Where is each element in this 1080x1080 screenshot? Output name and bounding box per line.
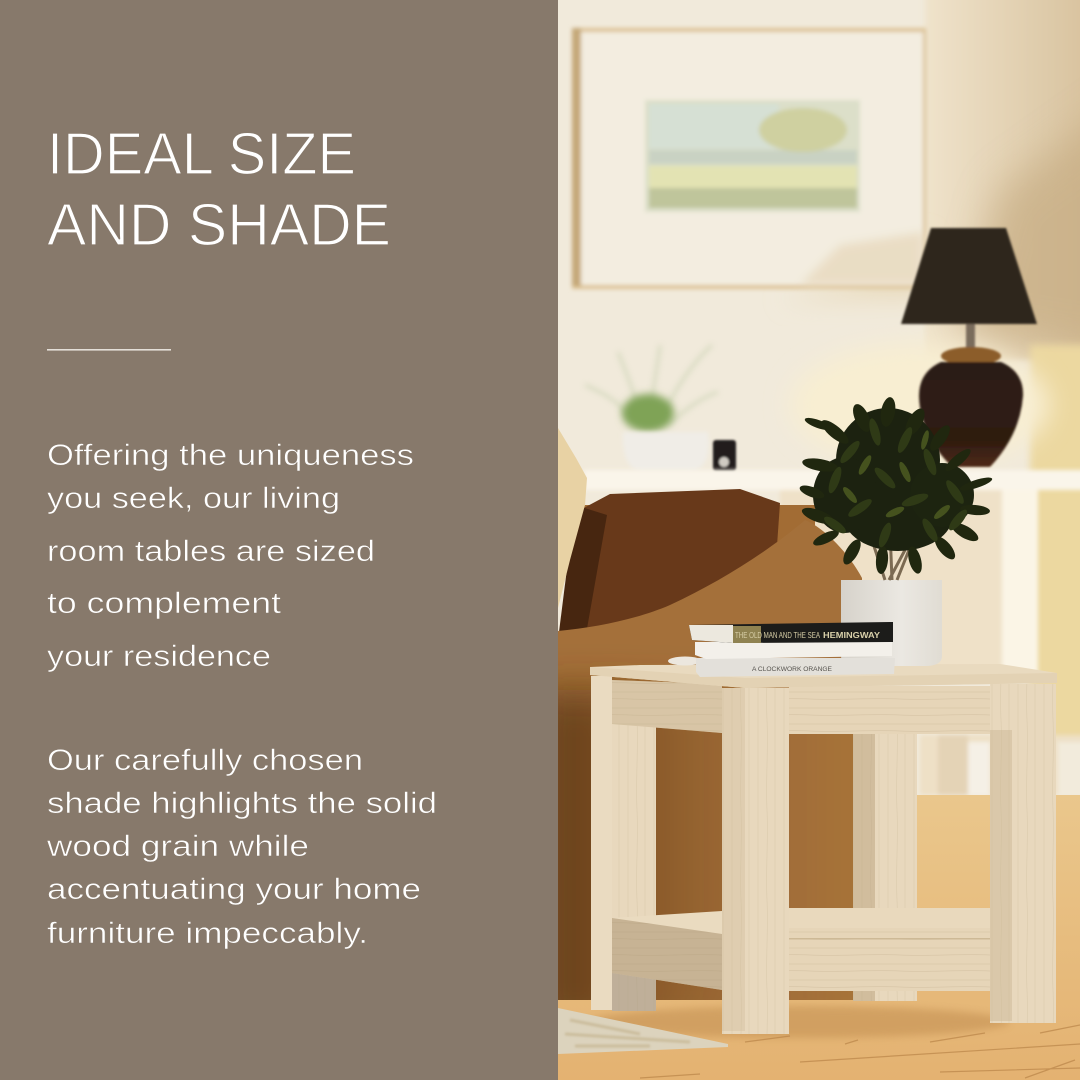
text block: uniqueness paragraph: your residence (47, 640, 271, 673)
right leg (990, 684, 1056, 1023)
text block: uniqueness paragraph: you seek, our living (47, 482, 340, 515)
stack of books (668, 622, 895, 677)
top book: HEMINGWAY (823, 630, 880, 640)
table top (590, 664, 1057, 688)
text block: shade paragraph (46, 744, 437, 950)
floor (558, 795, 1080, 1080)
sofa (558, 428, 862, 1000)
top book: THE OLD MAN AND THE SEA (735, 630, 820, 640)
text block: shade paragraph: accentuating your home (47, 873, 421, 906)
top book (689, 622, 893, 643)
title (47, 121, 391, 258)
middle book (695, 642, 892, 659)
text block: uniqueness paragraph (47, 439, 414, 673)
text block: shade paragraph: furniture impeccably. (47, 917, 368, 950)
sofa cushions (580, 489, 780, 645)
plant foliage (798, 396, 993, 575)
end table (590, 664, 1057, 1034)
stack of books: A CLOCKWORK ORANGE (752, 667, 832, 673)
text block: uniqueness paragraph: Offering the uniqueness (47, 439, 414, 472)
small black candle holder (713, 440, 736, 471)
title: IDEAL SIZE (47, 121, 356, 187)
panel: text background (0, 0, 558, 1080)
bottom book (696, 658, 895, 677)
text block: uniqueness paragraph: to complement (47, 587, 282, 620)
blurred potted grass (585, 345, 718, 471)
sofa back (575, 505, 815, 635)
plant stems (872, 530, 915, 580)
rug corner (558, 1008, 728, 1054)
shelf (612, 908, 1011, 991)
front leg (722, 688, 789, 1034)
framed artwork (572, 28, 926, 289)
panel: room photo scene (558, 0, 1080, 1080)
text block: shade paragraph: wood grain while (46, 830, 309, 863)
console table (584, 470, 1080, 795)
upper aprons (612, 680, 1011, 734)
text block: shade paragraph: shade highlights the solid (47, 787, 437, 820)
sofa arm (558, 520, 862, 1000)
wall (558, 0, 1080, 800)
back right leg (853, 732, 917, 1001)
divider under title (47, 349, 171, 351)
left leg (612, 720, 656, 1011)
cream throw (558, 428, 587, 608)
title: AND SHADE (47, 192, 391, 258)
plant pot (841, 580, 942, 666)
outer left leg face (591, 676, 612, 1010)
text block: shade paragraph: Our carefully chosen (47, 744, 363, 777)
saucer (668, 656, 702, 666)
text block: uniqueness paragraph: room tables are sized (47, 535, 375, 568)
table lamp (901, 228, 1037, 467)
